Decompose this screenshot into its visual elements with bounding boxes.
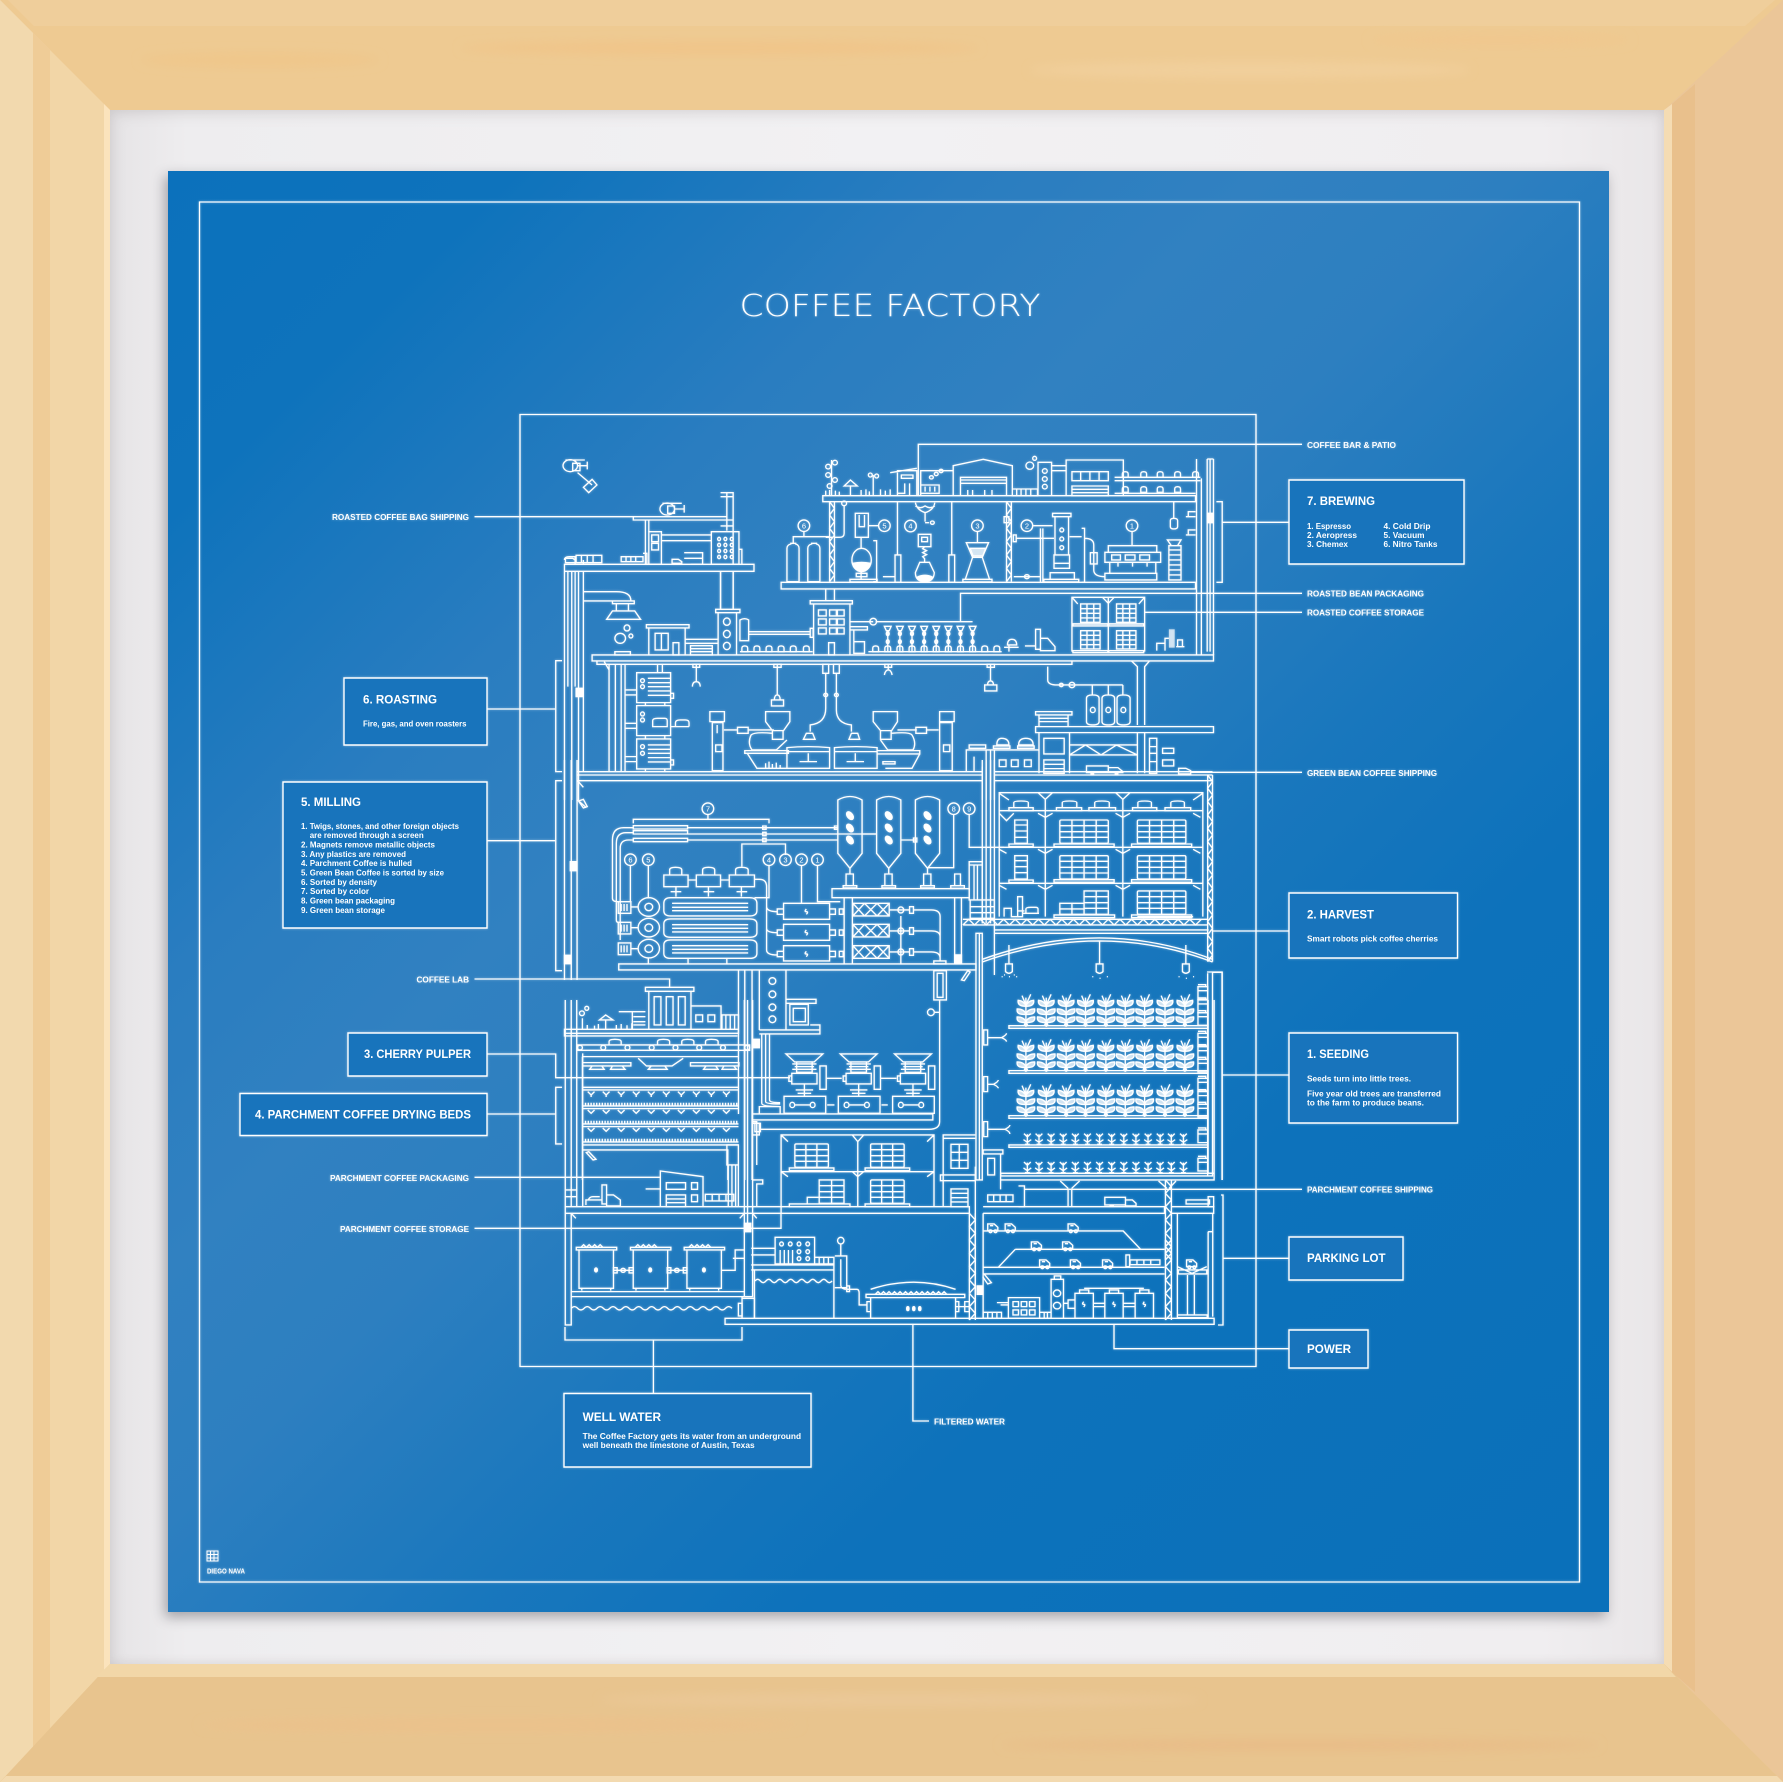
panel: 5 milling: 6. Sorted by density xyxy=(301,878,378,887)
marker 6 brew xyxy=(798,520,810,532)
panel: 1 seeding: to the farm to produce beans. xyxy=(1307,1098,1424,1108)
frame: top rail xyxy=(0,0,1783,110)
conveyor xyxy=(578,1039,750,1050)
hood and bubbles xyxy=(583,592,641,655)
coffee pipes xyxy=(803,664,860,739)
office building xyxy=(940,1000,1214,1207)
marker 7 mill xyxy=(702,803,714,814)
panel: 5 milling: 2. Magnets remove metallic objects xyxy=(301,840,436,850)
harvest truss xyxy=(963,919,1208,925)
parchment packaging xyxy=(565,1122,763,1207)
panel: 5 milling xyxy=(283,782,487,928)
panel: 1 seeding xyxy=(1289,1033,1458,1123)
panel: power: POWER xyxy=(1307,1342,1351,1356)
seedling racks xyxy=(1001,972,1222,1180)
roasters and coolers xyxy=(710,712,954,771)
panel: 6 roasting: Fire, gas, and oven roasters xyxy=(363,720,467,728)
panel: 5 milling: 9. Green bean storage xyxy=(301,906,386,915)
panel: 5 milling: are removed through a screen xyxy=(310,831,424,840)
panel: 7 brewing: 3. Chemex xyxy=(1307,540,1349,549)
panel: 5 milling: 8. Green bean packaging xyxy=(301,896,395,906)
sorting rails xyxy=(612,814,917,940)
panel: 1 seeding: Five year old trees are transferred xyxy=(1307,1090,1441,1098)
marker 6 brew: 6 xyxy=(802,521,806,530)
marker 4 mill xyxy=(763,854,775,866)
panel: 6 roasting: 6. ROASTING xyxy=(363,692,437,706)
panel: 1 seeding: Seeds turn into little trees. xyxy=(1307,1074,1411,1084)
panel: 3 cherry pulper xyxy=(348,1033,487,1076)
marker 1 mill: 1 xyxy=(815,855,820,864)
coffee bar buildings xyxy=(890,456,1200,496)
frame: right inner lip xyxy=(1664,104,1672,1672)
marker 7 mill: 7 xyxy=(706,804,710,813)
label: green bean coffee shipping: GREEN BEAN COFFEE SHIPPING xyxy=(1307,769,1437,778)
brew 2: aeropress xyxy=(1004,513,1105,582)
panel: 4 parchment coffee drying beds: 4. PARCHMENT COFFEE DRYING BEDS xyxy=(255,1108,471,1122)
label: parchment coffee storage: PARCHMENT COFFEE STORAGE xyxy=(340,1225,470,1234)
forklifts xyxy=(1004,629,1184,652)
marker 3 brew: 3 xyxy=(975,521,979,530)
water filter xyxy=(751,1237,969,1318)
cherry pulpers xyxy=(784,1054,935,1113)
marker 5 brew: 5 xyxy=(882,521,886,530)
leader lines xyxy=(474,444,1302,1421)
marker 2 mill: 2 xyxy=(799,855,804,864)
drying beds xyxy=(582,1057,739,1180)
label: roasted bean packaging: ROASTED BEAN PACKAGING xyxy=(1307,590,1424,598)
marker 4 brew: 4 xyxy=(908,522,913,531)
hanging claws xyxy=(692,664,997,706)
parking ramps xyxy=(983,1224,1165,1284)
section: milling floor xyxy=(556,760,1222,1180)
panel: 3 cherry pulper: 3. CHERRY PULPER xyxy=(364,1047,471,1061)
marker 2 mill xyxy=(796,854,807,866)
process number markers xyxy=(625,520,1138,866)
brew 3: chemex xyxy=(963,531,992,582)
marker 5 brew xyxy=(879,520,890,532)
frame: top grain xyxy=(140,33,1630,78)
label: parchment coffee packaging: PARCHMENT COFFEE PACKAGING xyxy=(330,1174,469,1183)
frame: right rail stripe xyxy=(1672,84,1695,1692)
power plant xyxy=(983,1276,1153,1318)
label: coffee lab: COFFEE LAB xyxy=(416,976,469,984)
irrigation hooks xyxy=(984,1030,1010,1137)
panel: well water xyxy=(564,1394,811,1467)
base slab xyxy=(725,1297,1214,1324)
marker 2 brew: 2 xyxy=(1025,521,1029,530)
section: shipping deck with helicopters xyxy=(563,460,754,800)
drawing frame xyxy=(520,414,1256,1366)
marker 3 brew xyxy=(972,520,983,532)
hullers and tanks xyxy=(618,865,757,964)
signature: Diego Nava xyxy=(207,1551,245,1576)
elevator column xyxy=(982,750,994,800)
marker 9 mill: 9 xyxy=(967,804,971,813)
panel: well water: WELL WATER xyxy=(583,1410,661,1424)
panel: power xyxy=(1289,1330,1368,1368)
brew 6: nitro tanks xyxy=(787,501,847,582)
parking lot ground xyxy=(988,1181,1214,1318)
marker 1 brew: 1 xyxy=(1130,521,1134,530)
marker 8 mill xyxy=(948,803,960,814)
bagging droppers xyxy=(742,626,1002,652)
panel: 2 harvest xyxy=(1289,893,1458,958)
frame: bottom lip xyxy=(96,1664,1676,1677)
frame: bottom rail xyxy=(0,1664,1783,1782)
marker 5 mill: 5 xyxy=(646,855,650,864)
pipes and pulper enclosure xyxy=(738,970,946,1180)
panel: parking lot: PARKING LOT xyxy=(1307,1251,1386,1265)
parchment storage room xyxy=(781,1135,934,1213)
panel: 2 harvest: 2. HARVEST xyxy=(1307,908,1375,922)
green bean storage shelves xyxy=(999,793,1203,918)
panel: 5 milling: 1. Twigs, stones, and other foreign objects xyxy=(301,822,460,831)
label: roasted coffee bag shipping: ROASTED COFFEE BAG SHIPPING xyxy=(332,513,469,522)
panel: 7 brewing: 7. BREWING xyxy=(1307,494,1375,508)
section: packaging floor xyxy=(583,571,1213,664)
signature: Diego Nava: DIEGO NAVA xyxy=(207,1567,245,1576)
panel: well water: well beneath the limestone of Austin, Texas xyxy=(582,1441,755,1450)
panel: 7 brewing xyxy=(1289,480,1464,564)
marker 1 mill xyxy=(812,854,823,866)
marker 4 mill: 4 xyxy=(767,855,771,864)
marker 3 mill: 3 xyxy=(783,855,788,864)
marker 2 brew xyxy=(1021,520,1033,532)
title: COFFEE FACTORY xyxy=(740,289,1040,324)
roasted factory xyxy=(646,571,973,655)
well water tanks xyxy=(571,1245,754,1318)
section: lower level xyxy=(565,1000,1214,1325)
shipping buildings and trucks xyxy=(565,532,742,564)
marker 6 mill xyxy=(625,854,636,866)
frame: right rail xyxy=(1664,0,1783,1782)
sorters xyxy=(754,865,946,964)
label: coffee bar and patio: COFFEE BAR & PATIO xyxy=(1307,441,1396,450)
panel: 5 milling: 5. MILLING xyxy=(301,795,361,809)
panel: 2 harvest: Smart robots pick coffee cherries xyxy=(1307,934,1439,944)
blueprint poster sheet xyxy=(168,171,1609,1612)
panel: parking lot xyxy=(1289,1237,1403,1280)
brew 4: cold drip xyxy=(895,502,955,582)
brew 1: espresso machine xyxy=(1105,502,1222,582)
green bean capsules xyxy=(1048,661,1149,725)
elevator xyxy=(969,862,994,918)
green bean shipping building xyxy=(966,712,1213,774)
marker 5 mill xyxy=(642,854,654,866)
marker 9 mill xyxy=(963,803,975,814)
patio plants and umbrella xyxy=(826,460,890,496)
section: brewing floor xyxy=(781,456,1222,655)
frame: top rail outer band xyxy=(8,0,1775,26)
marker 8 mill: 8 xyxy=(952,804,956,813)
section: coffee lab xyxy=(556,970,946,1180)
panel: 7 brewing: 4. Cold Drip xyxy=(1384,522,1431,531)
label: roasted coffee storage: ROASTED COFFEE STORAGE xyxy=(1307,608,1425,618)
panel: 7 brewing: 1. Espresso xyxy=(1307,522,1351,531)
panel: 5 milling: 7. Sorted by color xyxy=(301,887,369,896)
silos xyxy=(832,796,1004,964)
panel: well water: The Coffee Factory gets its water from an underground xyxy=(583,1432,801,1441)
panel: 4 parchment coffee drying beds xyxy=(240,1094,487,1136)
blueprint line art xyxy=(200,202,1580,1582)
panel: 7 brewing: 2. Aeropress xyxy=(1307,531,1358,540)
frame: bottom outer edge xyxy=(0,1776,1783,1782)
pest drones xyxy=(578,799,970,1160)
frame: left rail xyxy=(0,0,110,1782)
panel: 7 brewing: 6. Nitro Tanks xyxy=(1384,540,1438,549)
section: roasting floor xyxy=(556,661,1213,800)
panel: 7 brewing: 5. Vacuum xyxy=(1384,531,1424,540)
panel: 1 seeding: 1. SEEDING xyxy=(1307,1047,1369,1061)
brew 5: vacuum xyxy=(850,513,895,582)
roasted coffee shelves xyxy=(1072,597,1145,653)
marker 4 brew xyxy=(905,520,916,532)
frame: left inner lip xyxy=(104,104,110,1670)
greenhouse arc xyxy=(976,930,1213,1180)
marker 1 brew xyxy=(1126,520,1138,532)
marker 3 mill xyxy=(780,854,791,866)
oven roasters xyxy=(625,673,689,772)
picture mat xyxy=(110,110,1664,1664)
frame: left rail outer band xyxy=(0,0,33,1782)
frame: bottom grain xyxy=(200,1694,1600,1751)
drones xyxy=(563,460,684,515)
panel: 5 milling: 4. Parchment Coffee is hulled xyxy=(301,859,412,868)
sheet border xyxy=(200,202,1580,1582)
label: parchment coffee shipping: PARCHMENT COFFEE SHIPPING xyxy=(1307,1186,1433,1194)
panel: 6 roasting xyxy=(344,678,487,745)
panel: 5 milling: 3. Any plastics are removed xyxy=(301,850,406,859)
label: filtered water: FILTERED WATER xyxy=(934,1418,1005,1426)
frame: left rail stripe xyxy=(33,33,50,1748)
marker 6 mill: 6 xyxy=(628,855,632,864)
panel: 5 milling: 5. Green Bean Coffee is sorted by size xyxy=(301,868,445,878)
